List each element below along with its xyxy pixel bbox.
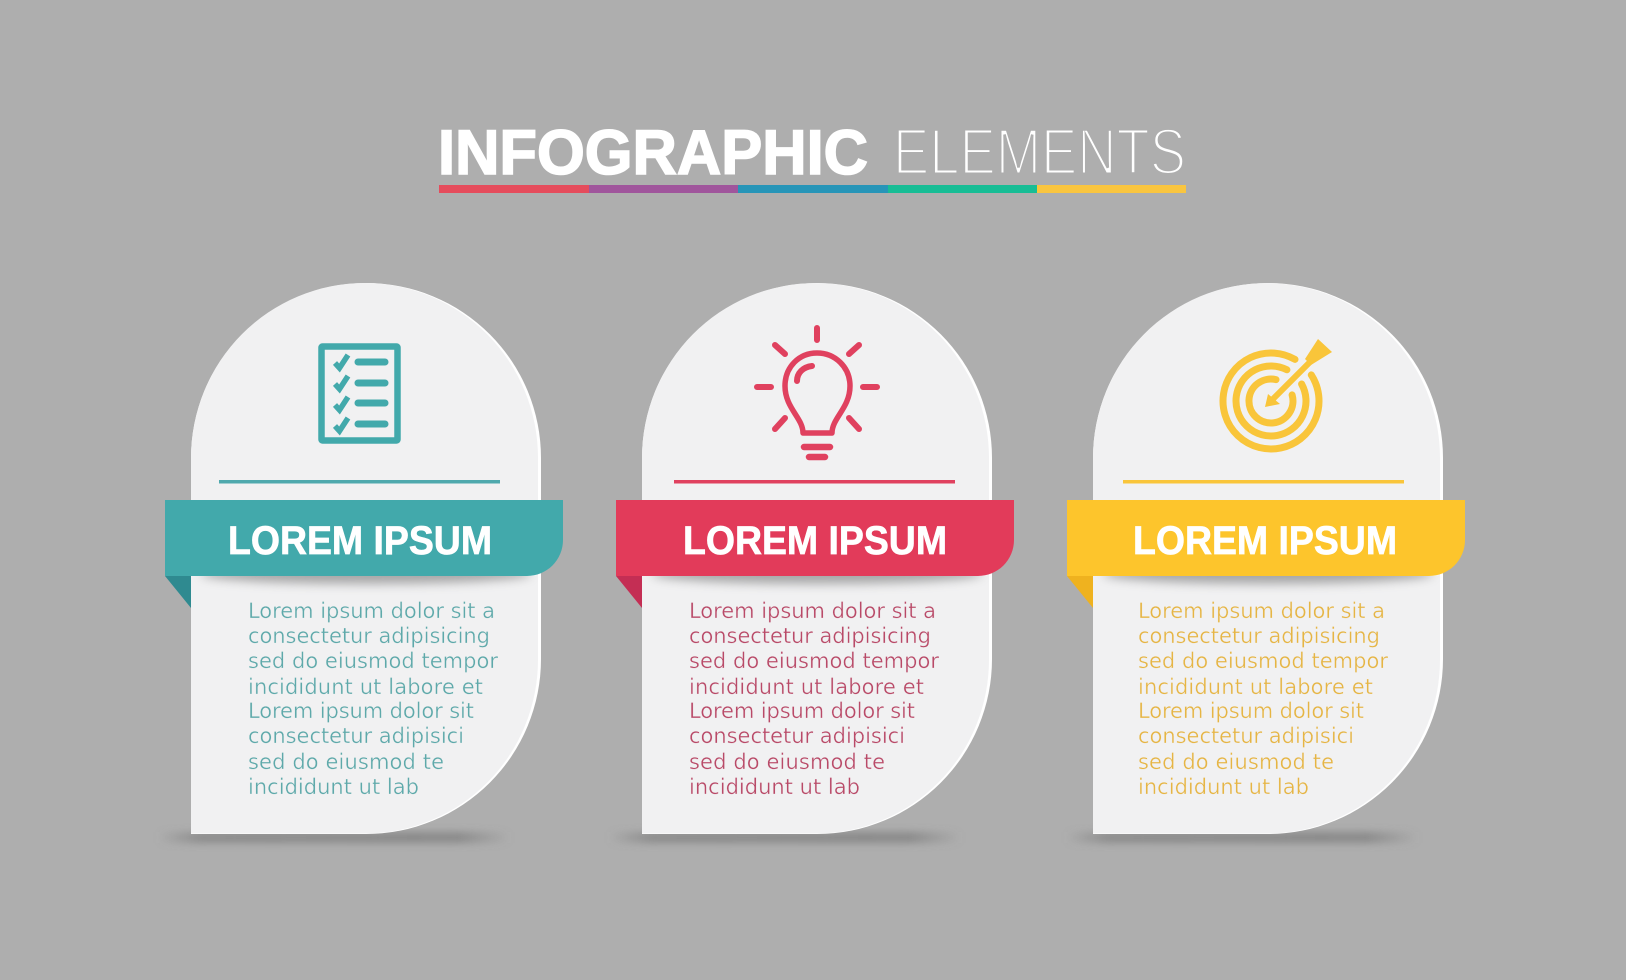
body text: consectetur adipisici: [248, 724, 464, 748]
body text: [689, 599, 939, 799]
divider line: [219, 480, 500, 484]
ribbon: [616, 500, 1014, 576]
panel: idea card: [609, 283, 1014, 843]
icon: target with dart: [1223, 339, 1332, 449]
body text: sed do eiusmod tempor: [248, 649, 498, 673]
body text: consectetur adipisicing: [248, 624, 490, 648]
ribbon shadow: [200, 576, 532, 590]
body text: Lorem ipsum dolor sit: [248, 699, 474, 723]
body text: Lorem ipsum dolor sit: [689, 699, 915, 723]
title: INFOGRAPHIC: [438, 118, 868, 188]
ribbon fold: [616, 576, 642, 608]
ribbon: [1067, 500, 1465, 576]
body text: Lorem ipsum dolor sit a: [248, 599, 495, 623]
title colour bar: [439, 185, 1186, 193]
divider line: [674, 480, 955, 484]
body text: sed do eiusmod te: [248, 750, 444, 774]
body text: incididunt ut lab: [248, 775, 419, 799]
body text: consectetur adipisici: [689, 724, 905, 748]
body text: incididunt ut labore et: [689, 675, 924, 699]
title: ELEMENTS: [893, 115, 1186, 188]
ribbon fold: [1067, 576, 1093, 608]
body text: Lorem ipsum dolor sit a: [1138, 599, 1385, 623]
divider line: [1123, 480, 1404, 484]
card 2 body: [642, 283, 992, 834]
ribbon shadow: [1102, 576, 1434, 590]
ribbon: [165, 500, 563, 576]
ribbon heading: LOREM IPSUM: [683, 519, 947, 563]
body text: sed do eiusmod tempor: [1138, 649, 1388, 673]
ribbon heading: LOREM IPSUM: [1133, 519, 1397, 563]
body text: incididunt ut lab: [1138, 775, 1309, 799]
body text: consectetur adipisicing: [689, 624, 931, 648]
body text: Lorem ipsum dolor sit: [1138, 699, 1364, 723]
body text: sed do eiusmod te: [1138, 750, 1334, 774]
icon: checklist: [322, 346, 398, 440]
panel: checklist card: [158, 283, 563, 843]
body text: sed do eiusmod tempor: [689, 649, 939, 673]
ribbon shadow: [651, 576, 983, 590]
panel: target card: [1066, 283, 1465, 843]
body text: incididunt ut labore et: [248, 675, 483, 699]
card 1 body: [191, 283, 541, 834]
body text: incididunt ut labore et: [1138, 675, 1373, 699]
body text: consectetur adipisici: [1138, 724, 1354, 748]
body text: sed do eiusmod te: [689, 750, 885, 774]
ribbon heading: LOREM IPSUM: [228, 519, 492, 563]
body text: incididunt ut lab: [689, 775, 860, 799]
body text: consectetur adipisicing: [1138, 624, 1380, 648]
body text: Lorem ipsum dolor sit a: [689, 599, 936, 623]
body text: [248, 599, 498, 799]
ribbon fold: [165, 576, 191, 608]
card 3 body: [1093, 283, 1443, 834]
title: [438, 115, 1186, 188]
icon: light bulb: [757, 328, 877, 457]
body text: [1138, 599, 1388, 799]
